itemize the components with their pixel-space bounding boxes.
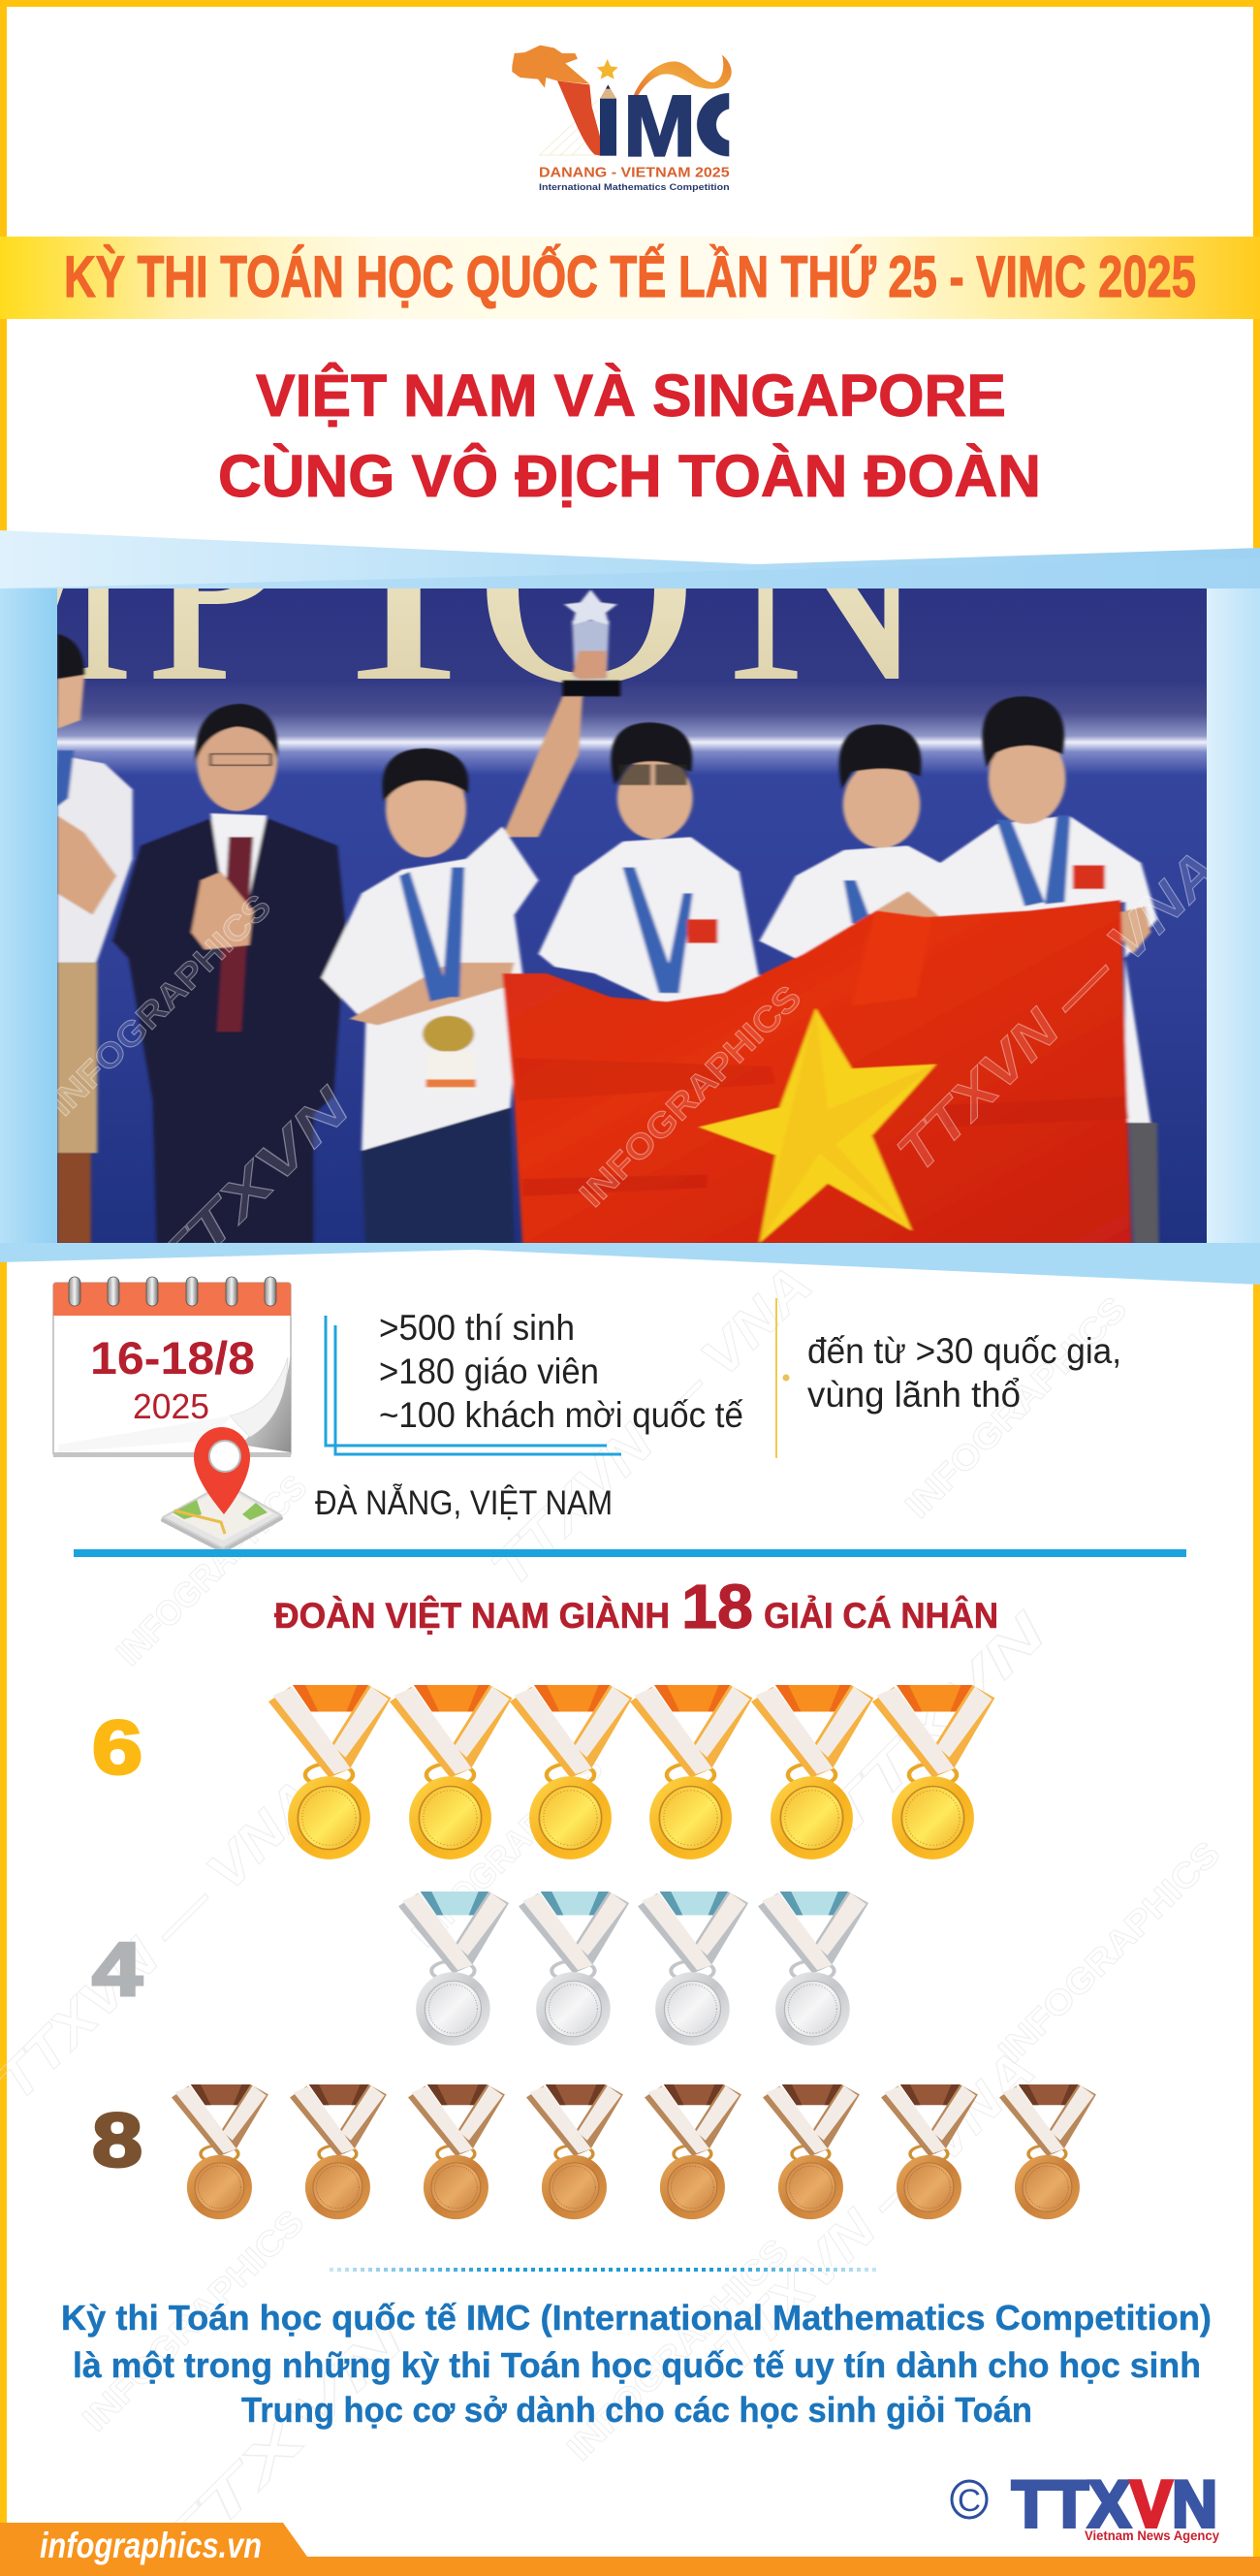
silver count: 4 [92, 1926, 142, 2012]
footer site name: infographics.vn [40, 2526, 262, 2565]
trophy [562, 589, 620, 696]
description text: Trung học cơ sở dành cho các học sinh giỏi Toán [241, 2390, 1032, 2430]
logo star [597, 59, 618, 80]
logo text IMC: International Mathematics Competition [539, 182, 730, 192]
main title [218, 363, 1041, 509]
medals heading: ĐOÀN VIỆT NAM GIÀNH [274, 1595, 670, 1636]
left cropped boy [57, 634, 133, 1243]
participant brackets [326, 1316, 621, 1454]
main title: VIỆT NAM VÀ SINGAPORE [256, 363, 1006, 429]
background watermarks: TTXVN — VNA [702, 2039, 1047, 2383]
stage letters: O [474, 423, 699, 745]
TTXVN logo: TTXVN [1012, 2467, 1217, 2541]
logo fan lines [540, 100, 598, 155]
background watermarks: INFOGRAPHICS [109, 1467, 315, 1673]
background watermarks: INFOGRAPHICS [898, 1288, 1134, 1526]
photo watermarks: TTXVN — VNA [885, 839, 1230, 1183]
banner [0, 237, 1260, 319]
medals heading: GIẢI CÁ NHÂN [764, 1595, 998, 1636]
third boy [759, 724, 982, 963]
background watermarks: INFOGRAPHICS [991, 1833, 1227, 2071]
silver medals [398, 1892, 868, 2046]
photo watermarks: INFOGRAPHICS [42, 886, 278, 1124]
photo watermarks: TTXVN [140, 1075, 362, 1297]
man in suit [112, 704, 346, 1243]
background watermarks: TTXVN — VNA [479, 1254, 824, 1598]
medals heading [274, 1572, 998, 1641]
background watermarks: INFOGRAPHICS [75, 2202, 311, 2439]
logo letter M: M [623, 78, 696, 175]
main title: CÙNG VÔ ĐỊCH TOÀN ĐOÀN [218, 443, 1041, 509]
logo pencil [600, 84, 616, 156]
logo dragon [512, 46, 600, 156]
participants text: >500 thí sinh [379, 1308, 575, 1348]
background watermarks [0, 1254, 1227, 2576]
participants text [379, 1308, 743, 1435]
calendar rings [69, 1277, 276, 1306]
blue divider [74, 1549, 1186, 1557]
agency name: Vietnam News Agency [1085, 2528, 1219, 2543]
photo: Vietnamese team with flag [57, 588, 1207, 1243]
calendar year: 2025 [133, 1386, 209, 1426]
yellow divider [775, 1298, 789, 1458]
boy with glasses [538, 722, 759, 1003]
logo: VIMC [512, 46, 732, 192]
countries text: vùng lãnh thổ [807, 1375, 1021, 1415]
photo watermarks [57, 854, 1207, 1243]
logo text Danang: DANANG - VIETNAM 2025 [539, 165, 730, 181]
copyright mark [952, 2481, 987, 2518]
gold medals [268, 1685, 994, 1860]
bronze medals [172, 2084, 1096, 2219]
icon: map pin [163, 1427, 281, 1551]
description text: Kỳ thi Toán học quốc tế IMC (International Mathematics Competition) [61, 2298, 1212, 2337]
participants text: ~100 khách mời quốc tế [379, 1395, 743, 1435]
location text: ĐÀ NẴNG, VIỆT NAM [315, 1483, 613, 1522]
gold count: 6 [92, 1704, 142, 1790]
copyright mark: C [958, 2483, 981, 2518]
background watermarks: INFOGRAPHICS [404, 1748, 611, 1955]
background watermarks: TTXVN [808, 1600, 1058, 1850]
bronze count: 8 [92, 2097, 142, 2182]
description text: là một trong những kỳ thi Toán học quốc tế uy tín dành cho học sinh [73, 2345, 1201, 2385]
icon: calendar [53, 1277, 291, 1457]
fourth boy [940, 696, 1159, 1243]
stage letters: I [345, 420, 462, 742]
logo ribbon [630, 55, 732, 105]
blue wave background [0, 530, 1260, 1285]
boy with trophy [322, 696, 583, 1243]
medals heading: 18 [681, 1572, 753, 1641]
stage letters: N [727, 420, 929, 742]
stage letters [57, 588, 899, 683]
countries text [807, 1331, 1121, 1415]
photo watermarks: INFOGRAPHICS [572, 977, 808, 1215]
stage letters: P [144, 420, 290, 742]
calendar date: 16-18/8 [90, 1332, 255, 1383]
countries text: đến từ >30 quốc gia, [807, 1331, 1121, 1371]
description text [61, 2298, 1212, 2430]
Vietnamese flag [502, 900, 1131, 1243]
footer [0, 2523, 1260, 2576]
logo protractor C [697, 93, 729, 156]
background watermarks: INFOGRAPHICS [559, 2231, 796, 2468]
participants text: >180 giáo viên [379, 1352, 599, 1391]
flag star [699, 1008, 936, 1243]
